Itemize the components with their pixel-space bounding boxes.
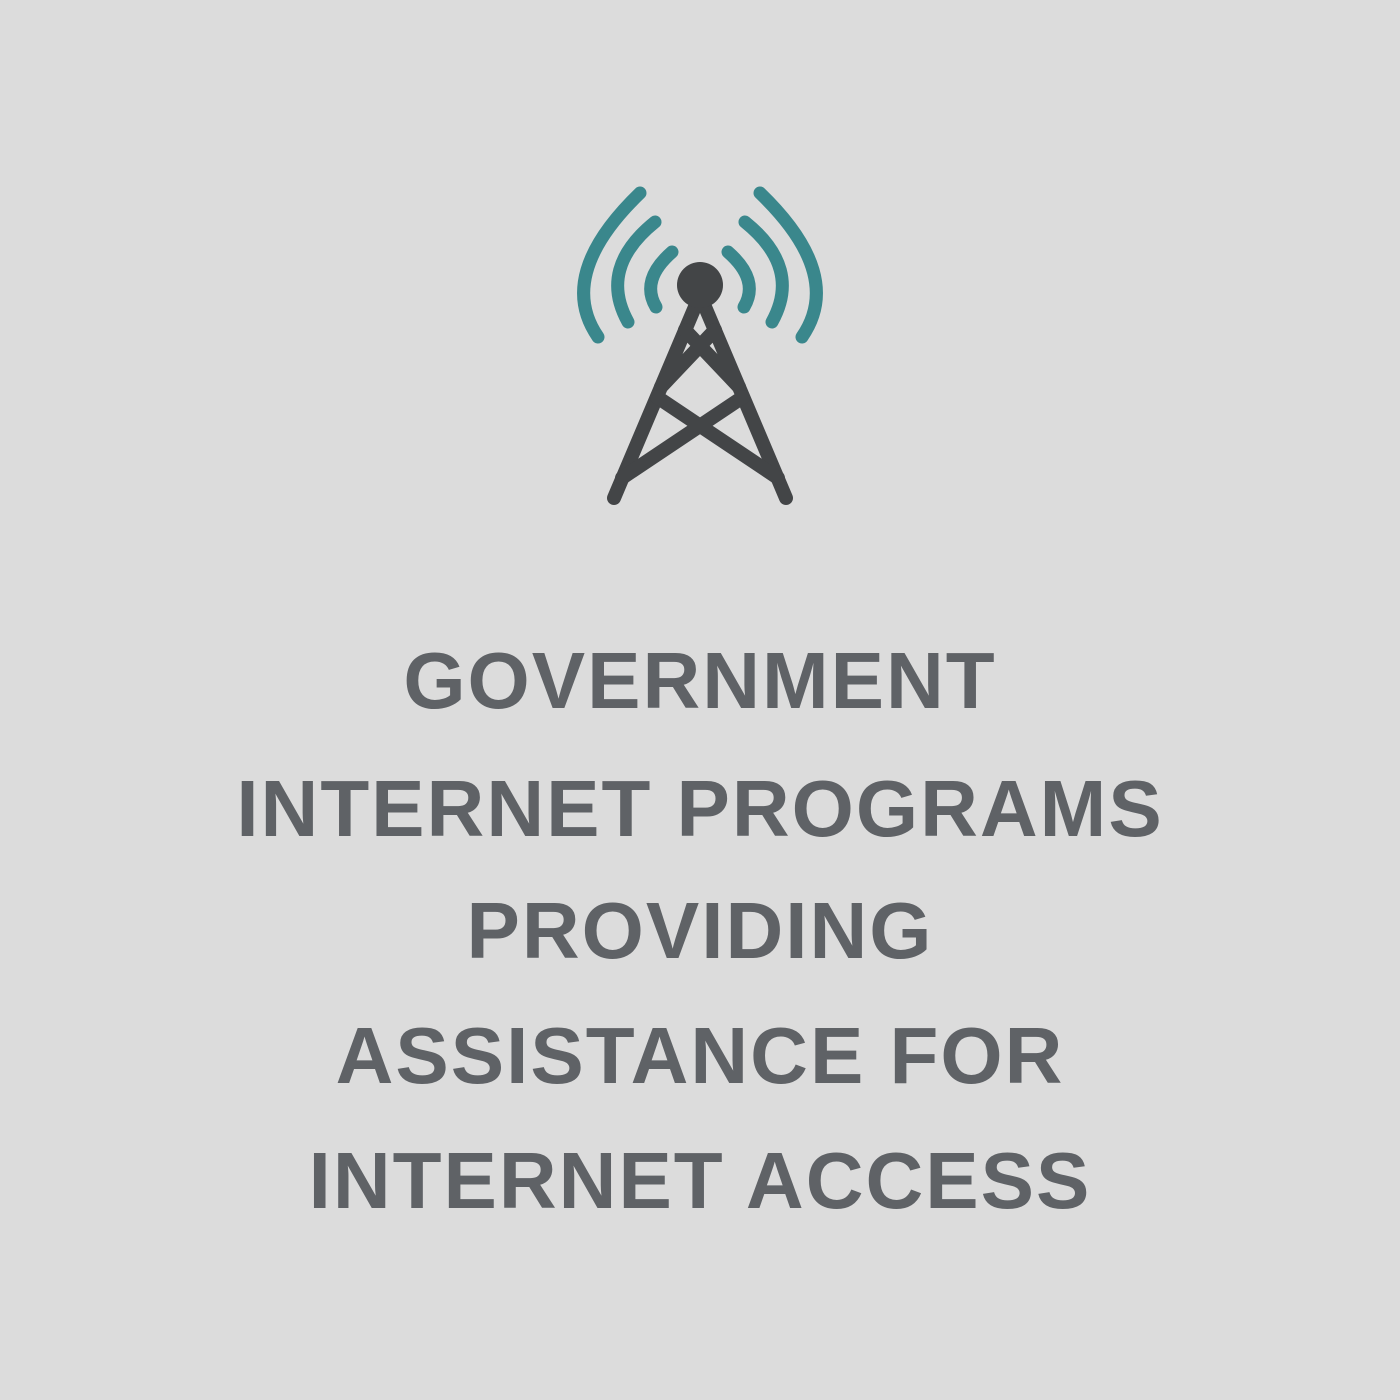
title: PROVIDING	[467, 886, 933, 975]
title: GOVERNMENT	[403, 636, 997, 725]
icon: radio tower	[577, 186, 823, 505]
title: ASSISTANCE FOR	[336, 1011, 1064, 1100]
title: INTERNET PROGRAMS	[236, 764, 1164, 853]
icon: signal waves	[584, 193, 816, 337]
icon: tower structure	[614, 262, 786, 498]
title	[236, 636, 1164, 1225]
title: INTERNET ACCESS	[309, 1136, 1091, 1225]
